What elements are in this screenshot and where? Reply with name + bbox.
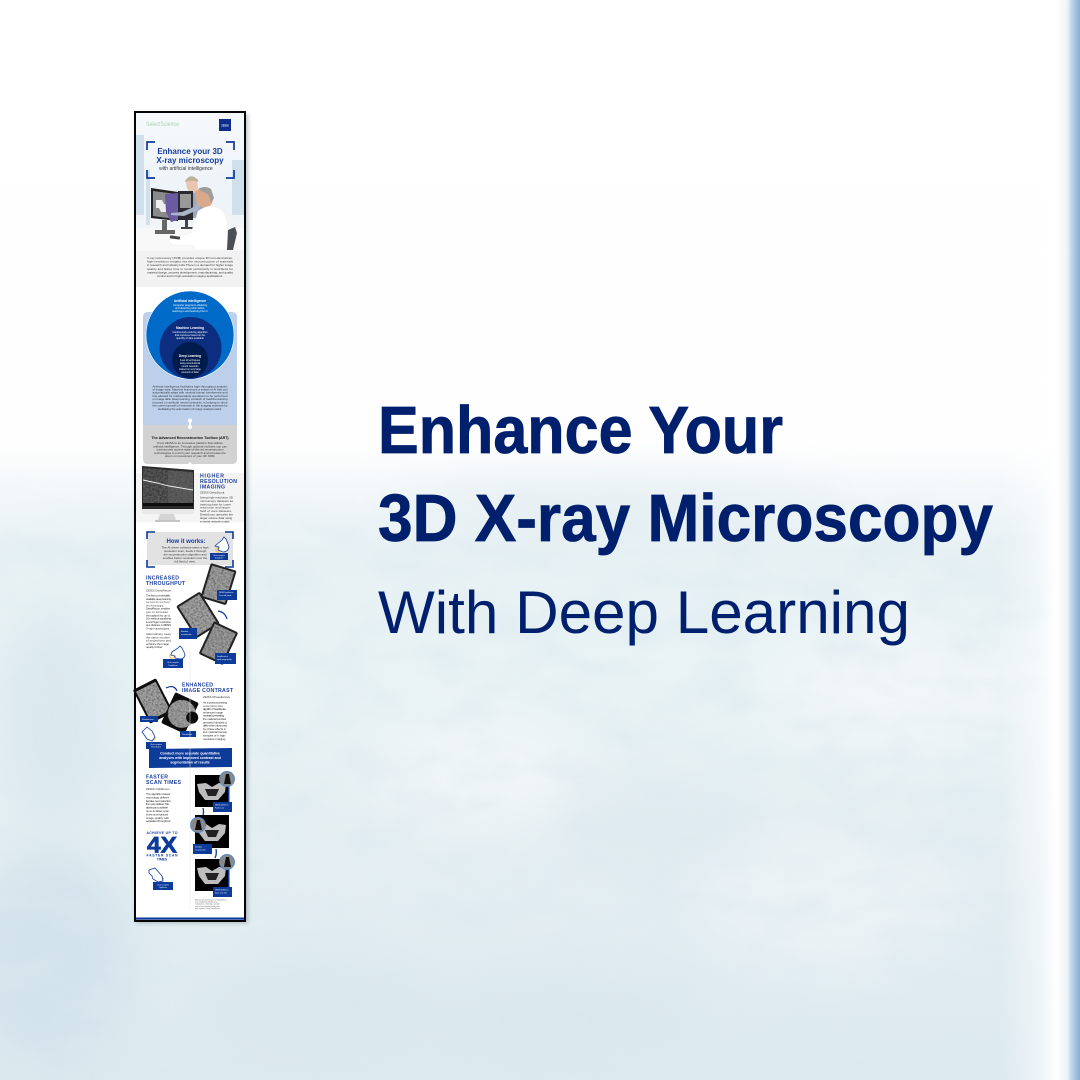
circle: Deep Learning: Deep Learning [179,354,201,358]
woman [180,192,211,218]
heading [146,774,182,786]
heading: IMAGING [200,484,225,490]
photo title: X-ray microscopy [156,156,224,165]
AI paragraph: facilitating the automation of image analysis tasks. [158,407,222,411]
body text: technology, [146,603,164,607]
body text: ZEISS DeepRecon [146,588,172,592]
CT scan 2 [190,815,229,848]
scan tablet A [133,678,173,724]
footnote: Material for performance of DeepRecon [195,898,227,902]
circle: Artificial Intelligence: Artificial Intelligence [174,299,206,303]
stat: 4X faster: 4X [147,832,177,858]
footnote: sets to be explored further with [195,905,220,908]
intro text panel [136,251,244,287]
panel: how it works: The AI-driven software takes a high [161,546,209,550]
panel: Advanced Reconstruction Toolbox: continuously access state-of-the-art reconstruction [156,448,224,452]
heading: ENHANCED [182,682,213,688]
body text: times at enhanced [146,812,168,816]
circle: Machine Learning [160,317,222,379]
scan tablet 3 [199,621,238,665]
label: click: Click to explore [167,661,179,664]
label: click: Click to explore [157,884,169,886]
callout banner: analyses with improved contrast and [159,756,221,760]
CT scan 3 [195,854,234,891]
circle: Deep Learning [172,342,208,378]
purple sample display [165,193,184,222]
panel: how it works [147,532,233,567]
panel: enhanced image contrast [133,678,234,768]
stat: 4X faster: ACHIEVE UP TO [146,831,178,835]
photo: scientists at monitors [151,176,237,250]
heading: SCAN TIMES [146,780,182,786]
label: ZEISS DeepScout: DeepScout [215,556,224,560]
circle: Machine Learning: Machine Learning [176,326,204,330]
body text [146,787,171,823]
body text: contrast by revealing [203,714,224,718]
label 3: equal image quality [217,658,232,661]
panel: Advanced Reconstruction Toolbox: From ZEISS is an innovative platform that utilizes [157,441,223,445]
body text: quality further. [146,645,163,649]
body text: you to increase [146,610,168,614]
circle: Deep Learning: using convolutional [180,362,201,365]
AI paragraph: the current growth of research in the imaging sciences by [152,404,228,408]
label: click: PhaseEvolve [151,746,161,748]
body text: reconstruction [146,600,170,604]
label 1 [217,590,237,600]
viewfinder brackets [147,142,234,178]
photo title [156,147,224,172]
heading: IMAGE CONTRAST [182,688,234,694]
footnote: comparison, showing a sample [195,904,220,906]
label 2 [179,628,197,639]
label: click: OptiRecon [159,886,167,889]
scan tablet B [161,692,204,736]
panel: how it works: the reconstruction algorithm and [164,552,207,556]
icon: hand click [170,646,185,659]
body text: equivalent throughput. [146,819,171,823]
heading: RESOLUTION [200,479,237,485]
body text: DeepRecon, enables [146,607,170,611]
body text: throughput by up to [146,613,170,617]
logo: ZEISS: ZEISS [221,123,229,127]
callout banner: segmentation of results [170,760,210,764]
body text: enhances image [203,710,223,714]
body text: X-ray microscopes. [146,626,170,630]
header photo panel [136,113,244,251]
panel: Advanced Reconstruction Toolbox: The Advanced Reconstruction Toolbox (ART) [151,436,229,440]
footnote [195,898,227,910]
heading line: 3D X-ray Microscopy: 3D X-ray Microscopy [378,481,993,556]
label: click [163,659,183,668]
label 2: Standard [181,630,188,633]
panel: blue AI background [143,291,237,425]
photo title: Enhance your 3D [157,147,223,156]
body text: from your desktop. This [146,802,170,806]
intro text panel: material design, process development, manufacturing, and quality [147,270,234,274]
body text: Using high-resolution 3D [200,496,234,500]
right monitor [178,191,193,220]
CT scan 1 [195,772,234,808]
AI paragraph: automatically adapt with minimal human interference and [152,391,228,395]
body text: ZEISS PhaseEvolve [203,695,230,699]
scan tablet 1 [200,563,237,605]
circle: Artificial Intelligence: learning to and learning from it [172,309,208,313]
circle: Machine Learning: quantity of data available [176,337,204,340]
panel: Advanced Reconstruction Toolbox: return on investment of your 3D XRM. [165,454,215,458]
body text: ZEISS DeepScout [200,490,225,494]
body text: training data for lower [200,502,231,506]
body text: resolution and larger [200,506,230,510]
body text: by phase effects in [203,727,226,731]
label: click [153,882,173,890]
arrow [166,687,177,691]
panel: higher resolution imaging [136,466,244,523]
heading: HIGHER [200,474,224,480]
label 3: ZEISS OptiRecon [215,888,228,892]
panel: how it works: full field of view. [174,560,196,564]
body text: ZEISS OptiRecon [146,787,170,791]
circle: Deep Learning: amounts of data [181,371,199,374]
body text: samples or in high- [203,734,226,738]
body text: differ when obscured [203,724,227,728]
heading [146,576,186,587]
woman's arm [171,198,203,216]
circle: Machine Learning: Continuously evolving algorithm [172,331,208,334]
logo: SelectScience: SelectScience [146,122,180,128]
label 1 [213,802,232,812]
arrow [202,808,204,815]
body text [146,588,172,649]
body text: Local Tiger resolution [146,620,171,624]
label 3: DeepRecon at [217,655,228,658]
body text: at a distance in ZEISS [146,623,171,627]
label 1: Pro at full speed [219,594,231,597]
body text [200,490,234,523]
body text: the material contrast [203,717,226,721]
label: ZEISS DeepScout: Click to explore [213,554,225,557]
label B: PhaseEvolve [182,734,192,736]
circle: Machine Learning: that improves based on the [175,334,206,337]
icon: hand click [142,727,155,741]
body text: reconstruction [203,704,223,708]
body text: The algorithm-based [146,792,170,796]
body text: enhance the image [146,642,169,646]
body text: Alternatively, keep [146,632,171,636]
connector between panels [188,418,192,466]
AI paragraph: on image data. Deep learning, a branch of machine learning [152,397,228,401]
heading: FASTER [146,774,168,780]
panel: how it works: How it works: [166,539,206,545]
label 2: Standard [195,846,202,848]
icon: hand click [149,868,163,882]
panel: Advanced Reconstruction Toolbox: artificial intelligence. Through optional modules you can [153,444,227,448]
body text: 10x without sacrificing [146,617,171,621]
body text: field of view datasets, [200,509,232,513]
intro text panel: quality and faster time to result particularly in workflows for [147,267,233,271]
circle: Artificial Intelligence: Computer programs obtaining [173,303,208,307]
body text: low-material density [203,730,228,734]
label 1: Faster scan [215,806,224,810]
heading [182,682,234,694]
body text: up to 4x faster scan [146,809,169,813]
body text: The first commercially [146,594,170,598]
label: click: DeepRecon [169,665,178,667]
label: click: Click to explore [150,743,162,746]
heading line: Enhance Your: Enhance Your [378,393,783,468]
label 3 [213,887,232,897]
arrow [218,611,227,619]
panel: Advanced Reconstruction Toolbox: technologies to enrich your research and increase the [154,451,226,455]
AI paragraph: of image data. Machine learning is a subset of AI that can [152,388,228,392]
intro text panel: high-resolution insights into the microstructure of materials [147,260,234,264]
body text [203,695,230,741]
callout banner [149,748,232,768]
circle: Deep Learning: A set of techniques [180,359,201,362]
body text: image quality with [146,816,169,820]
monitor with micrograph [142,466,194,522]
left monitor [151,188,178,221]
body text: of projections and [146,639,171,643]
AI paragraph: Artificial intelligence facilitates high-throughput analysis [152,384,228,388]
circle: Artificial Intelligence [146,291,234,379]
label 2: reconstruction [195,848,206,852]
callout banner: Conduct more accurate quantitative [160,752,220,756]
subheading: With Deep Learning [378,579,910,646]
body text: DeepScout upscales the [200,512,233,516]
body text: microscopy datasets as [200,499,234,503]
footnote: your system, using DeepRecon. [195,907,221,910]
body text: available deep learning [146,597,171,601]
panel: Advanced Reconstruction Toolbox [143,425,237,464]
arrow [215,849,216,858]
circle: Artificial Intelligence: and detecting information, [175,306,205,310]
photo title: with artificial intelligence [159,166,213,172]
man [195,188,213,208]
label 1: ZEISS OptiRecon [215,804,228,806]
label: click [146,742,166,749]
label A: Standard recon [142,718,154,721]
body text: a neural network model. [200,519,230,523]
AI paragraph: has allowed for mathematical operations to be performed [152,394,228,398]
heading: INCREASED [146,576,179,582]
body text: As a post-processing [203,700,227,704]
AI paragraph: focused on artificial neural networks, is helping to drive [152,400,228,404]
heading [200,474,237,490]
panel: increased throughput [146,563,238,668]
stat: 4X faster: FASTER SCAN [146,854,178,858]
label: ZEISS DeepScout [210,553,228,560]
label 3 [215,653,236,664]
label 1: ZEISS DeepRecon [219,592,233,594]
body text: larger volume data using [200,516,232,520]
body text: iterative reconstruction [146,799,171,803]
body text: technology delivers [146,795,170,799]
label 2 [193,844,212,854]
body text: algorithm, PhaseEvolve [203,707,226,711]
body text: the same number [146,635,170,639]
intro text panel: X-ray microscopy (XRM) provides unique 3D non-destructive, [147,256,233,260]
panel: faster scan times [146,772,234,910]
stat: 4X faster: TIMES [157,858,168,862]
intro text panel: in research and industry labs.There is a demand for higher image [147,263,233,267]
scan tablet 2 [176,591,220,639]
stat: 4X faster [146,831,178,862]
icon: hand click [215,537,229,552]
body text: precisely blended to [203,720,227,724]
AI paragraph [152,384,228,411]
circle: Deep Learning: neural networks [182,365,199,368]
label 2: reconstruction [181,633,192,636]
footnote: at a standard resolution in a [195,901,217,904]
label 3: Same scan time [215,892,227,894]
body text: allows you to achieve [146,806,168,810]
footer bar [136,918,244,920]
heading: THROUGHPUT [146,581,186,587]
intro text panel: control and in high-resolution imaging applications. [157,274,223,278]
panel: how it works: enables better resolution over the [163,556,208,560]
panel: how it works: resolution scan, feeds it through [164,549,207,553]
body text: resolution imaging. [203,737,226,741]
circle: Deep Learning: trained on very large [179,368,202,371]
